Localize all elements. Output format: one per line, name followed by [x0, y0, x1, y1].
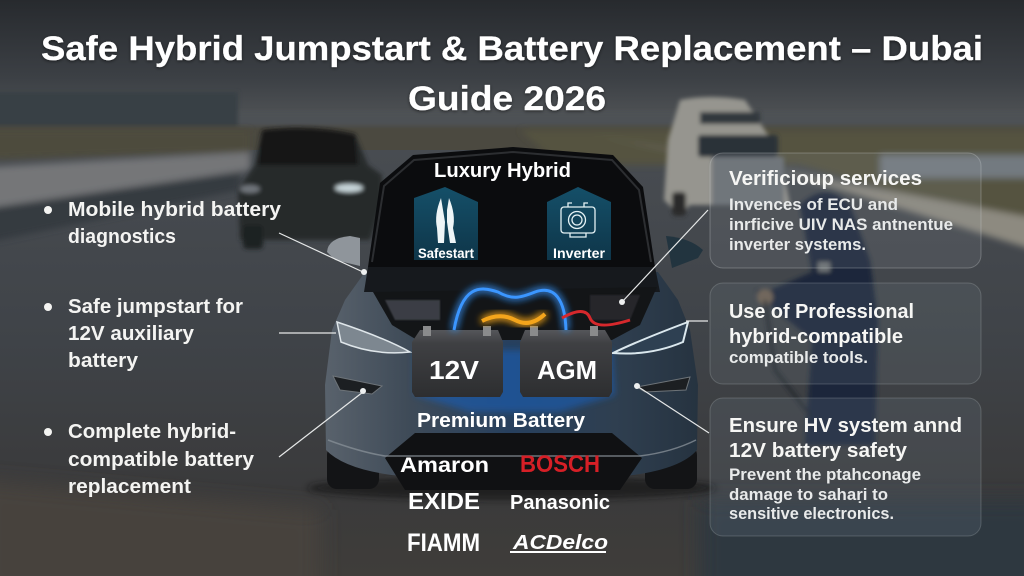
side mirrors	[327, 236, 703, 268]
logo: panasonic: Panasonic	[510, 492, 610, 514]
panel: verification services: inverter systems.	[729, 235, 866, 254]
orange energy current	[482, 314, 545, 323]
battery: AGM: AGM	[537, 355, 597, 385]
tyres	[327, 445, 697, 489]
panel: safety: sensitive electronics.	[729, 504, 894, 523]
list item: replacement: Complete hybrid-	[68, 421, 236, 443]
list item: replacement: compatible battery	[68, 449, 255, 471]
panel: safety: Ensure HV system annd	[729, 415, 962, 437]
background service van	[664, 97, 790, 216]
panel: professional tools: compatible tools.	[729, 348, 868, 367]
logo: acdelco: ACDelco	[512, 532, 608, 554]
list item: jumpstart: 12V auxiliary	[68, 323, 195, 345]
panel: verification services	[710, 153, 981, 268]
background car with open hood	[238, 128, 382, 249]
list item: replacement	[44, 421, 255, 498]
label: inverter: Inverter	[553, 246, 606, 261]
main hybrid car	[307, 147, 717, 557]
icon: inverter module	[561, 203, 595, 237]
right fog light	[637, 377, 690, 392]
car shadow	[307, 476, 717, 500]
panel: professional tools	[710, 283, 981, 384]
open hood	[368, 147, 655, 272]
panel: professional tools: hybrid-compatible	[729, 326, 903, 348]
left list: services	[44, 199, 282, 498]
list item: jumpstart: battery	[68, 350, 139, 372]
heading: premium battery: Premium Battery	[417, 410, 586, 432]
logo: amaron: Amaron	[400, 454, 489, 477]
list item: diagnostics	[44, 199, 282, 248]
title	[41, 30, 983, 118]
icon: jump clamps	[436, 198, 456, 243]
panel: safety: Prevent the ptahconage	[729, 465, 921, 484]
left headlight	[337, 322, 410, 353]
right headlight	[613, 322, 688, 354]
heading: luxury hybrid: Luxury Hybrid	[434, 160, 571, 182]
blue glow below batteries	[415, 350, 615, 412]
panel: professional tools: Use of Professional	[729, 301, 914, 323]
title: Guide 2026	[408, 80, 606, 118]
hood underside strip	[364, 267, 660, 292]
car body	[325, 272, 698, 476]
panel: safety: 12V battery safety	[729, 440, 908, 462]
list item: diagnostics: Mobile hybrid battery	[68, 199, 282, 221]
logo: bosch: BOSCH	[520, 451, 600, 478]
logo: exide: EXIDE	[408, 488, 480, 514]
panel: verification services: Verificioup services	[729, 168, 922, 190]
engine bay	[373, 287, 657, 340]
panel: inverter	[547, 187, 611, 261]
panel: verification services: inrficive UIV NAS antnentue	[729, 215, 953, 234]
list item: jumpstart	[44, 296, 243, 372]
lower bumper grille	[385, 433, 642, 490]
red cable	[562, 312, 630, 325]
leader lines with dots	[279, 210, 709, 457]
panel: verification services: Invences of ECU and	[729, 195, 898, 214]
title: Safe Hybrid Jumpstart & Battery Replacement – Dubai	[41, 30, 983, 68]
logo: fiamm: FIAMM	[407, 529, 480, 557]
brand logos	[400, 451, 610, 557]
list item: replacement: replacement	[68, 476, 191, 498]
battery: 12V	[412, 326, 503, 397]
panel: safety	[710, 398, 981, 536]
blue energy arcs	[454, 289, 566, 330]
left fog light	[333, 376, 382, 394]
label: safestart: Safestart	[418, 246, 474, 261]
background technician	[755, 192, 878, 445]
battery: 12V: 12V	[429, 355, 480, 385]
panel: safestart	[414, 187, 478, 261]
panel: safety: damage to sahaṛi to	[729, 485, 888, 504]
list item: jumpstart: Safe jumpstart for	[68, 296, 243, 318]
battery: AGM	[520, 326, 612, 397]
list item: diagnostics: diagnostics	[68, 226, 176, 248]
